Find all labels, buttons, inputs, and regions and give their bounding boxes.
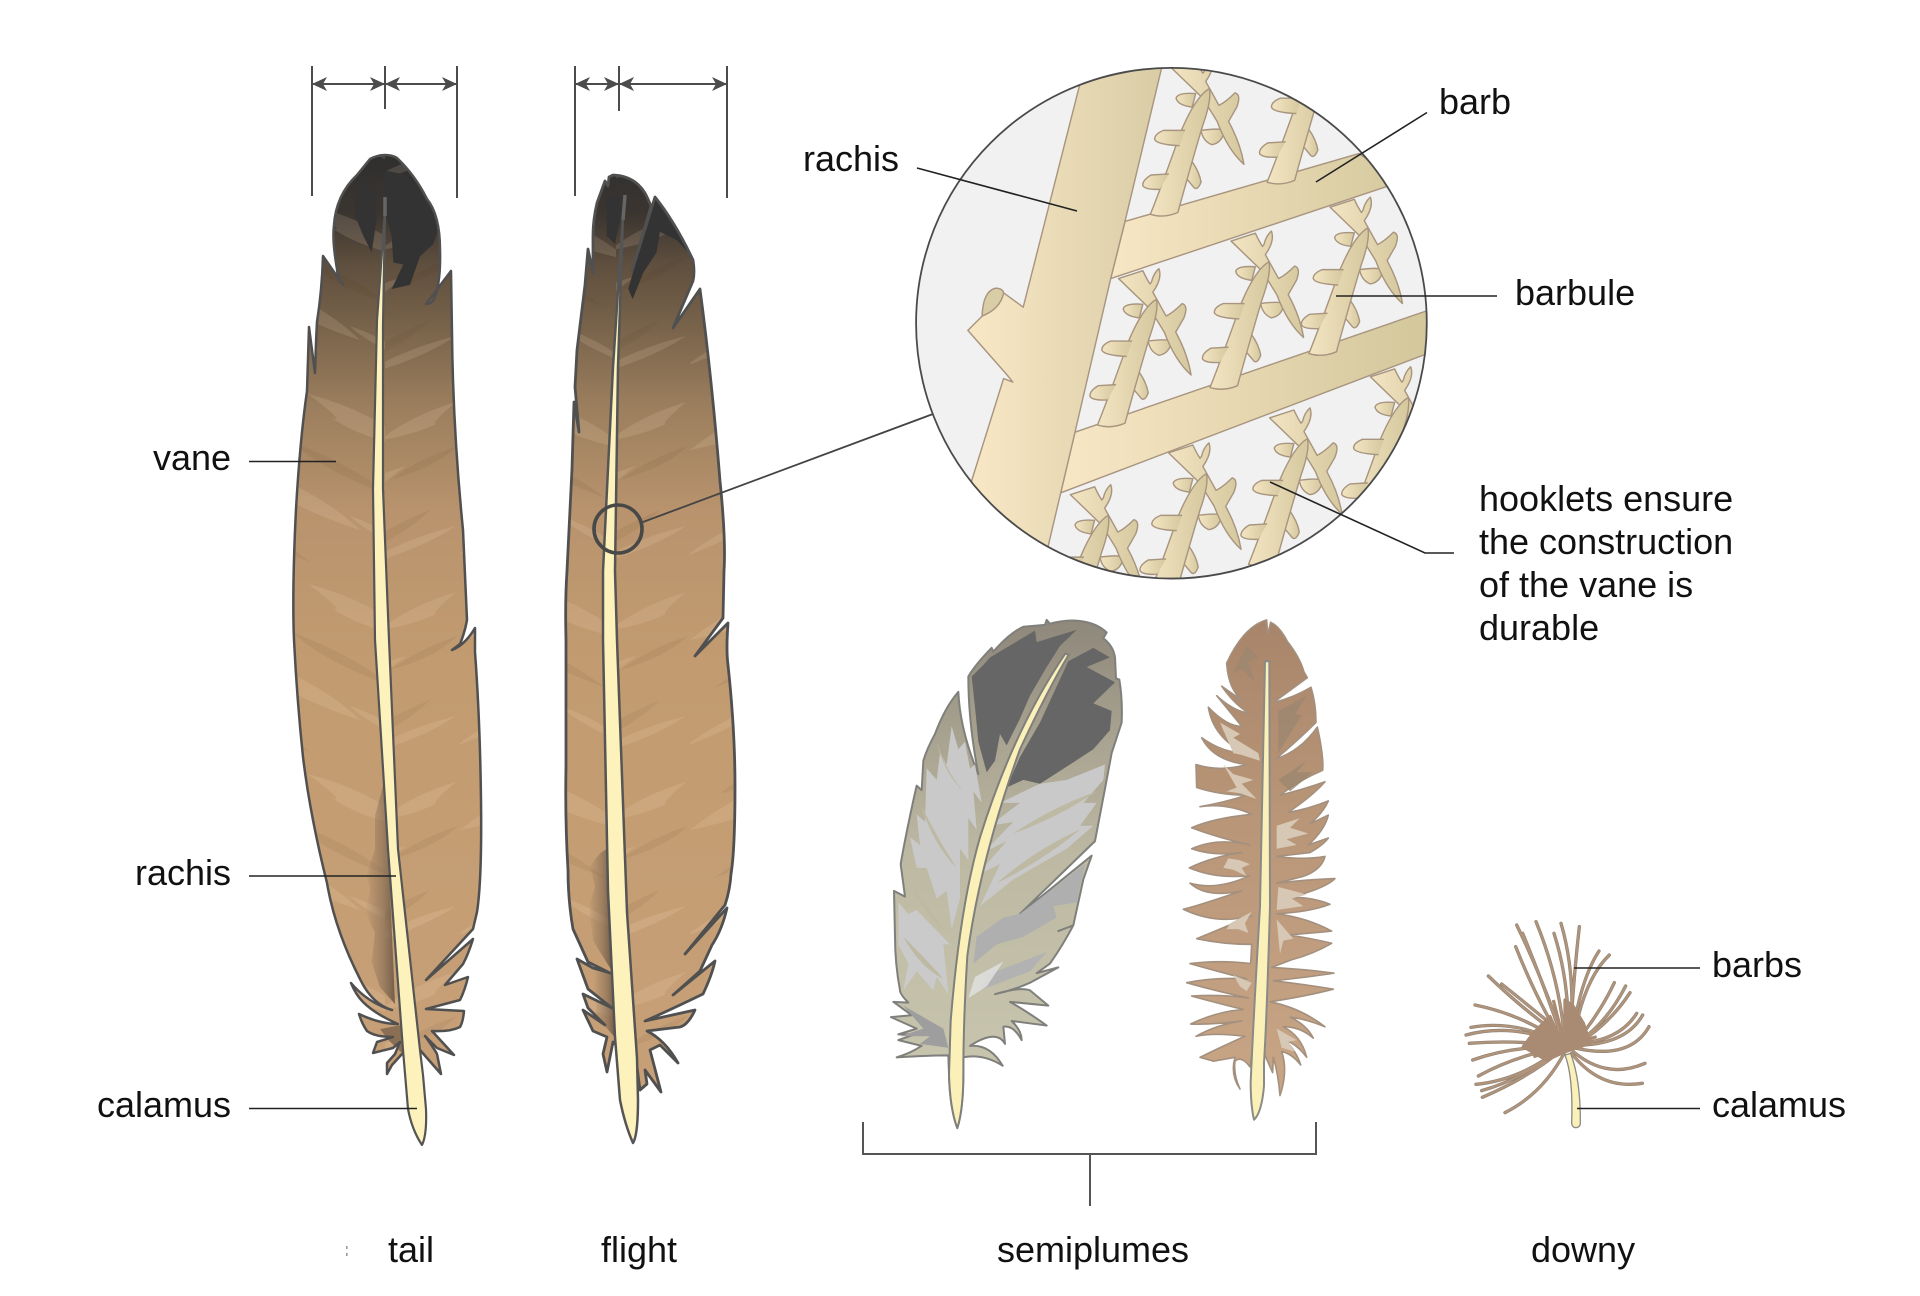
pale patches xyxy=(1220,722,1308,1052)
label: calamus on tail feather: calamus xyxy=(97,1084,231,1125)
dimension bracket: tail feather width xyxy=(312,66,457,198)
gray feather rachis xyxy=(949,654,1069,1128)
feather streaks over the gray patches xyxy=(903,742,1097,979)
magnifier ring on flight feather xyxy=(594,505,642,553)
tail feather rachis and calamus xyxy=(373,211,426,1145)
dark patch right of rachis xyxy=(1007,648,1115,788)
light gray patch left upper xyxy=(910,726,982,929)
label: barb: barb xyxy=(1439,81,1511,122)
stray mark near tail caption xyxy=(346,1246,348,1256)
semiplumes bracket xyxy=(863,1122,1316,1206)
flight feather texture and shading xyxy=(567,176,734,1083)
tail feather vane xyxy=(293,155,481,1074)
rachis with stub xyxy=(968,64,1162,554)
flight feather outline xyxy=(566,175,735,1092)
label: hooklets note: of the vane is xyxy=(1479,564,1693,605)
light gray patch right xyxy=(977,765,1105,906)
downy centre xyxy=(1523,1000,1597,1060)
tail feather outline xyxy=(293,155,481,1074)
semiplume: brown feather xyxy=(1183,620,1335,1120)
gray vane xyxy=(891,620,1122,1128)
barbules behind xyxy=(1070,58,1443,591)
label: hooklets note: the construction xyxy=(1479,521,1733,562)
downy barbs xyxy=(1466,922,1649,1113)
caption: downy: downy xyxy=(1531,1229,1635,1270)
label: hooklets note: durable xyxy=(1479,607,1599,648)
rachis stub end xyxy=(982,288,1004,316)
dark fluff patch lower left xyxy=(900,1006,948,1048)
gray patch lower band xyxy=(980,952,1047,990)
magnified circle: vane structure xyxy=(915,67,1428,580)
label: rachis in magnified view: rachis xyxy=(803,138,899,179)
semiplume: gray feather xyxy=(891,620,1122,1128)
flight feather vane xyxy=(566,175,735,1092)
upper barb xyxy=(1111,154,1400,279)
downy feather xyxy=(1466,922,1649,1128)
dark patch left of rachis xyxy=(972,630,1077,772)
barbules front xyxy=(1042,56,1409,643)
label: barbs on downy feather: barbs xyxy=(1712,944,1802,985)
label: hooklets note: hooklets ensure xyxy=(1479,478,1733,519)
label: barbule: barbule xyxy=(1515,272,1635,313)
label: rachis on tail feather: rachis xyxy=(135,852,231,893)
brown vane xyxy=(1183,620,1335,1096)
magnifier connector line xyxy=(643,414,933,522)
circle background xyxy=(916,68,1427,579)
flight feather rachis and calamus xyxy=(603,215,638,1143)
label: vane: vane xyxy=(153,437,231,478)
label: hooklets note xyxy=(1270,478,1733,648)
tail feather xyxy=(285,150,490,1145)
circle outline xyxy=(916,68,1427,579)
lower barb xyxy=(1061,309,1432,493)
darker brown patches xyxy=(1233,646,1313,791)
dimension bracket: flight feather width xyxy=(575,66,727,198)
mid gray patch lower right xyxy=(973,864,1085,964)
downy calamus xyxy=(1565,1053,1580,1128)
light gray patch left lower xyxy=(898,902,950,994)
white highlight xyxy=(968,962,1003,998)
caption: tail: tail xyxy=(388,1229,434,1270)
label: calamus on downy feather: calamus xyxy=(1712,1084,1846,1125)
flight feather xyxy=(560,170,741,1143)
caption: flight: flight xyxy=(601,1229,677,1270)
tail feather texture and shading xyxy=(296,156,480,1053)
label: barb xyxy=(1316,81,1511,182)
brown feather rachis xyxy=(1251,661,1270,1120)
caption: semiplumes: semiplumes xyxy=(997,1229,1189,1270)
label: rachis in magnified view xyxy=(803,138,1077,211)
